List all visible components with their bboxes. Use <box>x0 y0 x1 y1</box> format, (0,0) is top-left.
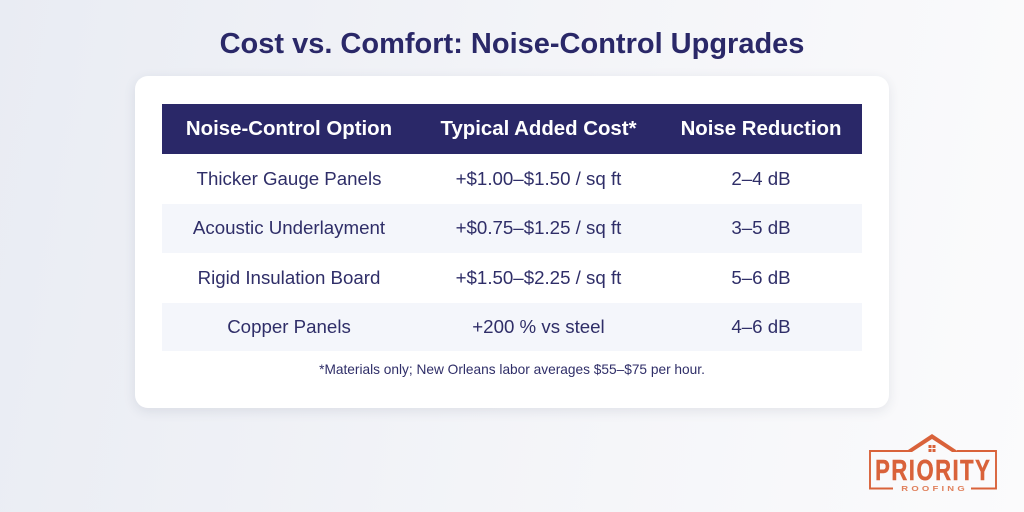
table header: Noise-Control Option <box>186 118 392 140</box>
row: acoustic underlayment <box>162 204 862 253</box>
row: acoustic underlayment: 3–5 dB <box>731 217 791 238</box>
row: copper panels: +200 % vs steel <box>472 316 605 336</box>
row: acoustic underlayment: +$0.75–$1.25 / sq ft <box>456 217 621 238</box>
row: rigid insulation board: 5–6 dB <box>731 266 791 288</box>
title: Cost vs. Comfort: Noise-Control Upgrades <box>220 28 804 60</box>
row: thicker gauge panels: Thicker Gauge Panels <box>197 168 381 188</box>
icon: house roof <box>905 434 959 452</box>
row: copper panels: Copper Panels <box>227 316 351 336</box>
row: thicker gauge panels: +$1.00–$1.50 / sq ft <box>456 168 621 188</box>
row: copper panels <box>162 303 862 351</box>
panel: comparison card <box>135 76 889 408</box>
row: rigid insulation board: Rigid Insulation Board <box>198 266 380 288</box>
table header: Typical Added Cost* <box>440 118 636 140</box>
footnote: *Materials only; New Orleans labor averages $55–$75 per hour. <box>319 362 705 377</box>
table header <box>162 104 862 154</box>
row: rigid insulation board <box>198 266 791 288</box>
logo wordmark: PRIORITY <box>875 455 990 487</box>
table header: Noise Reduction <box>681 118 841 140</box>
logo: Priority Roofing <box>869 434 997 493</box>
row: rigid insulation board: +$1.50–$2.25 / sq ft <box>456 266 621 288</box>
logo subtext: ROOFING <box>901 484 965 493</box>
row: thicker gauge panels <box>196 168 791 189</box>
row: acoustic underlayment: Acoustic Underlayment <box>193 217 385 238</box>
comparison table <box>162 104 862 351</box>
logo frame <box>870 451 996 488</box>
row: copper panels: 4–6 dB <box>731 316 791 336</box>
row: thicker gauge panels: 2–4 dB <box>731 168 791 188</box>
